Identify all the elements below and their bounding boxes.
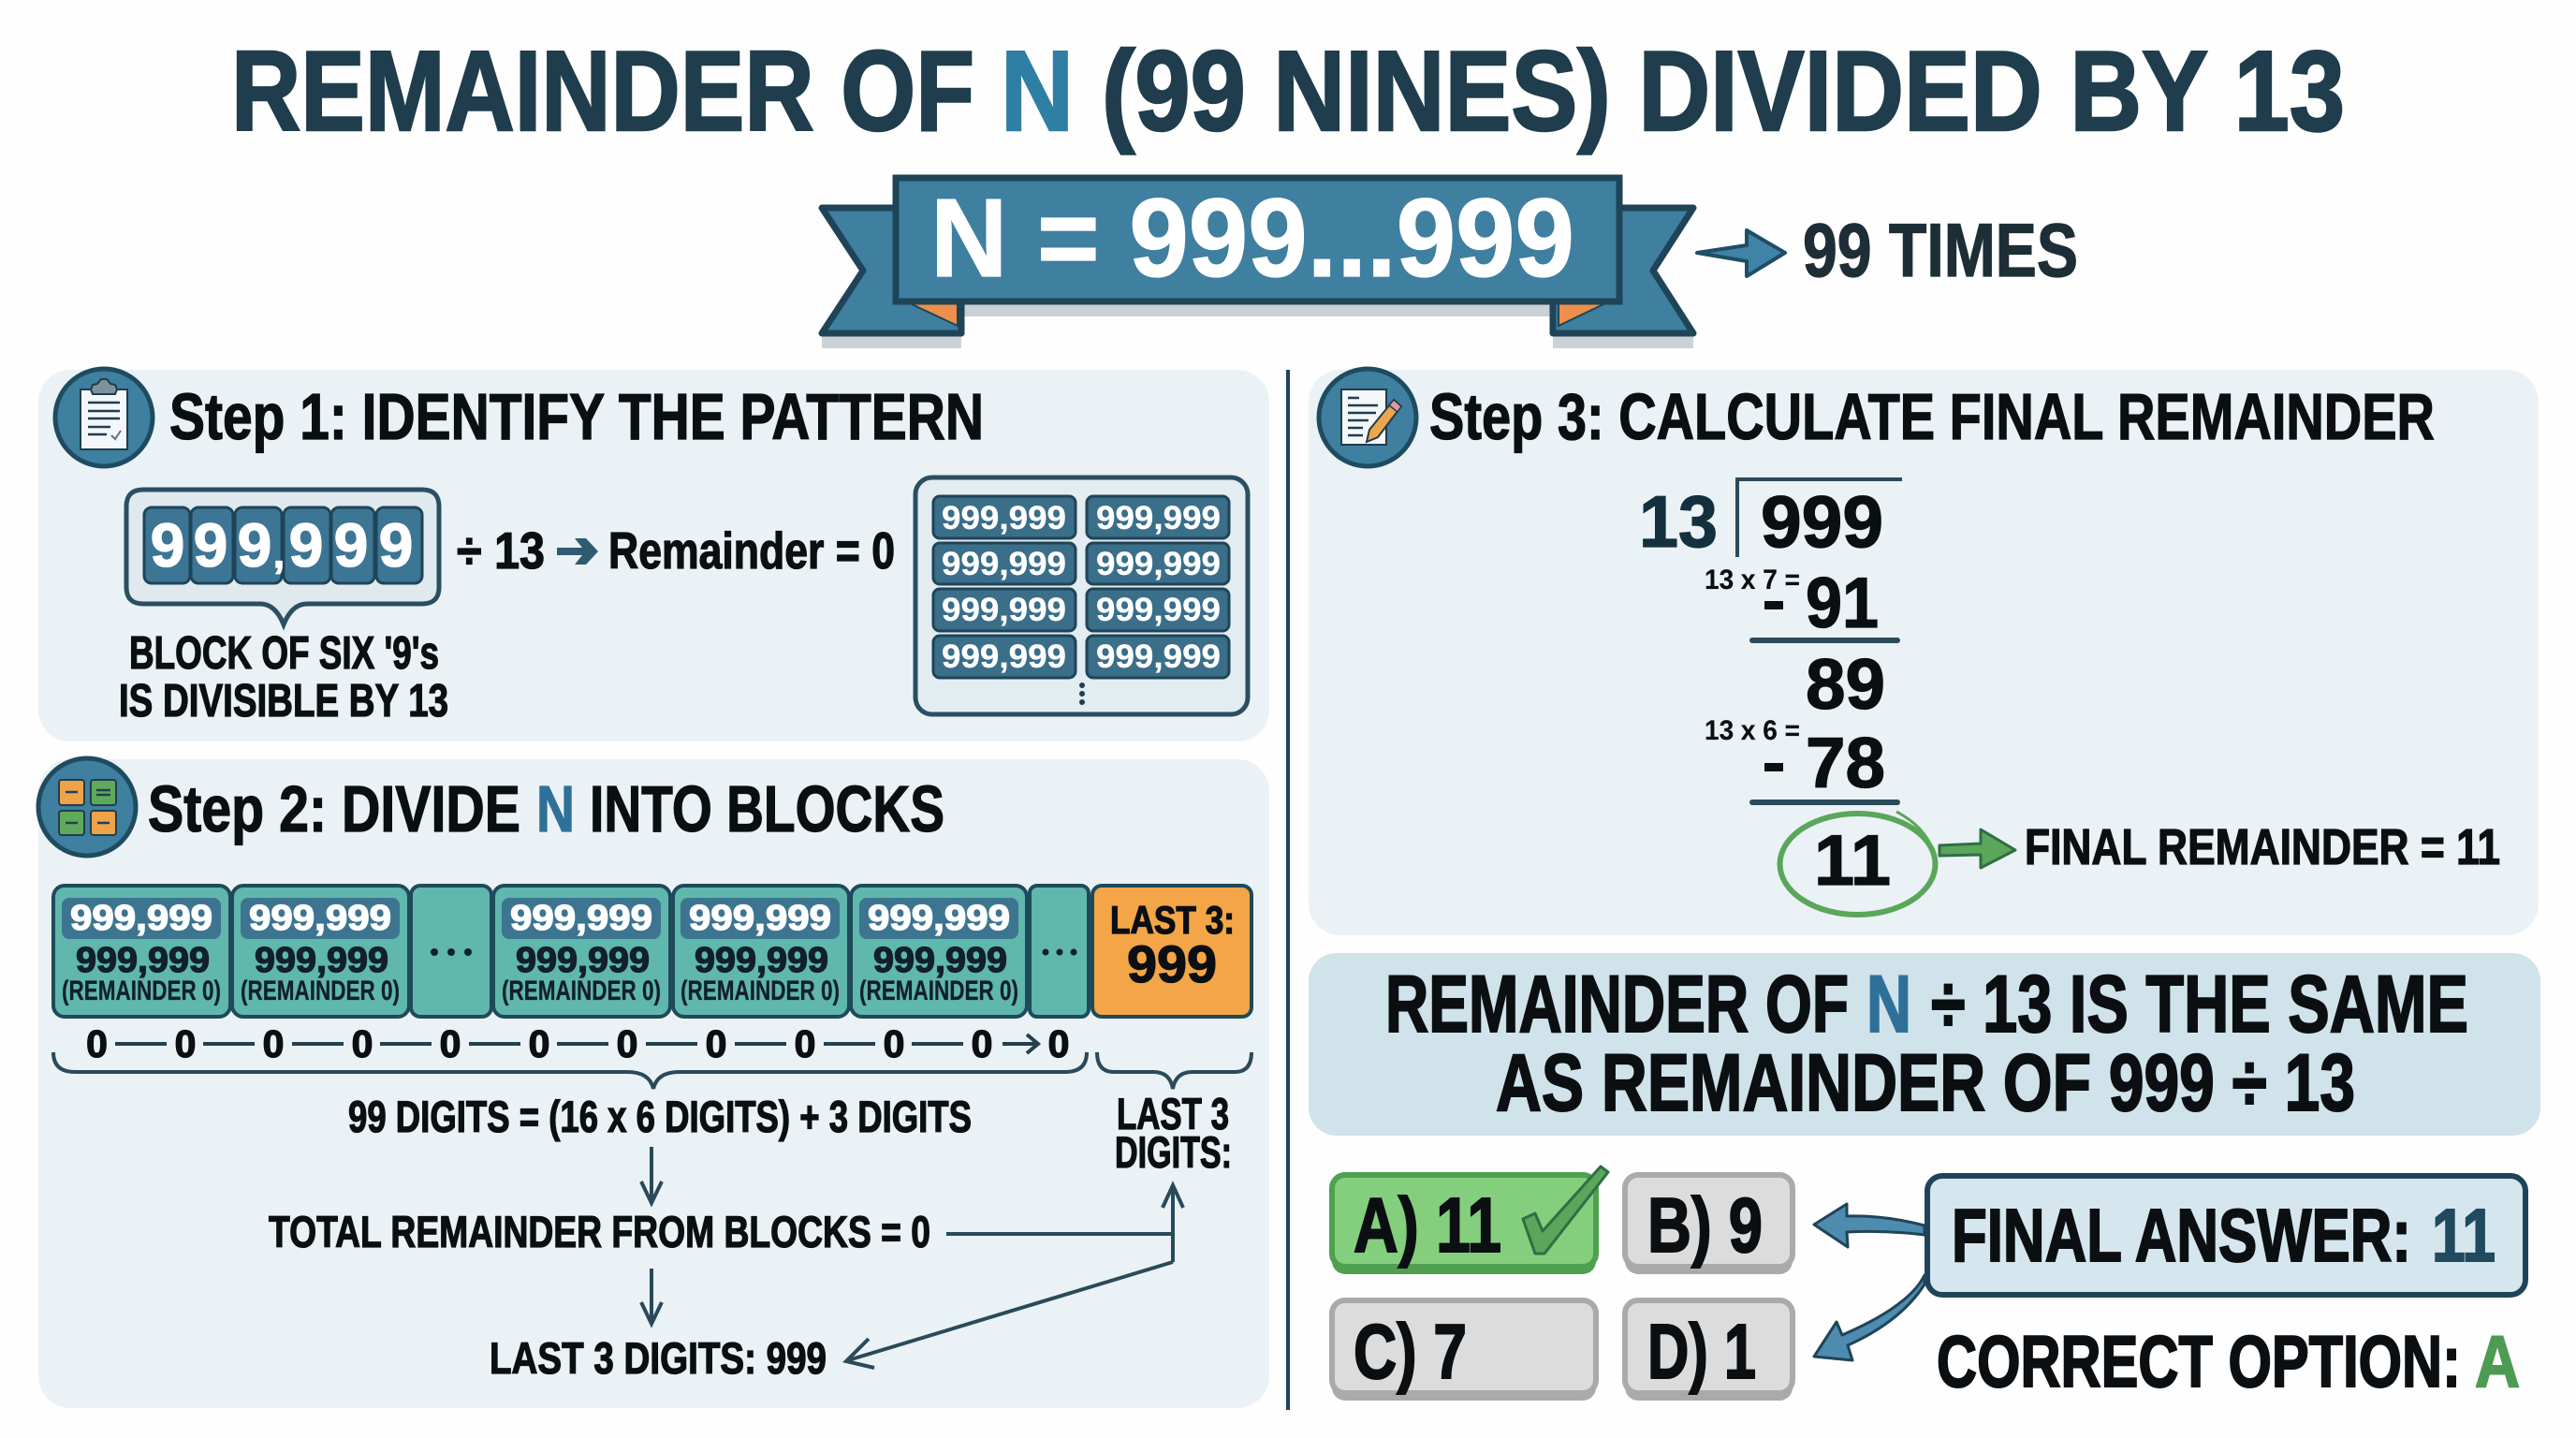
band: conclusion: [1309, 953, 2540, 1136]
text: digit breakdown: 99 DIGITS = (16 x 6 DIGITS) + 3 DIGITS: [348, 1092, 972, 1141]
title: N: [1001, 27, 1074, 154]
callout: six nines block: 9: [151, 510, 184, 580]
block: 4: 999,999: [695, 941, 828, 980]
arrow: diagonal to last digits: [846, 1262, 1173, 1368]
block: last 3 digits: LAST 3:: [1110, 898, 1235, 942]
grid of blocks: 999,999: [942, 592, 1066, 628]
callout: six nines block: 9: [289, 510, 323, 580]
option B: B) 9: [1647, 1181, 1763, 1269]
block: 2: [232, 886, 409, 1017]
caption: block of six: [119, 628, 448, 726]
long division: 78: [1806, 724, 1885, 803]
band: conclusion: AS REMAINDER OF 999 ÷ 13: [1496, 1038, 2355, 1128]
block: ellipsis end: [1030, 886, 1089, 1017]
arrow: final remainder: [1939, 829, 2015, 868]
block: 4: (REMAINDER 0): [681, 976, 840, 1006]
remainder chain: 0: [440, 1022, 461, 1065]
arrow: down to total: [641, 1147, 662, 1203]
block: last 3 digits: [1092, 886, 1251, 1017]
title: REMAINDER OF: [231, 27, 974, 154]
option C: [1332, 1300, 1596, 1401]
panel: step 1: [38, 369, 1269, 741]
caption: block of six: IS DIVISIBLE BY 13: [119, 676, 448, 726]
long division: 999: [1761, 480, 1883, 563]
vertical divider: [1286, 370, 1290, 1410]
option A: A) 11: [1354, 1181, 1501, 1269]
caption: block of six: BLOCK OF SIX '9's: [129, 628, 439, 679]
remainder chain: 0: [263, 1022, 284, 1065]
grid of blocks: [915, 477, 1248, 714]
remainder chain: 0: [884, 1022, 904, 1065]
icon: check mark: [1523, 1167, 1608, 1254]
long division: [1639, 479, 1936, 915]
block: 1: 999,999: [76, 941, 210, 980]
grid of blocks: 999,999: [942, 546, 1066, 582]
callout: six nines block: 9: [379, 510, 413, 580]
banner: N = 999...999: N = 999...999: [930, 176, 1574, 301]
block: 1: (REMAINDER 0): [62, 976, 221, 1006]
block: last 3 digits: 999: [1127, 934, 1217, 993]
long division: 11: [1814, 821, 1891, 901]
block: 3: 999,999: [510, 899, 652, 938]
text: last 3 digits 999: LAST 3 DIGITS: 999: [490, 1333, 827, 1383]
box: final answer: [1927, 1176, 2525, 1295]
banner: N = 999...999: [822, 176, 1693, 348]
text: correct option: A: [2475, 1320, 2520, 1402]
remainder chain: 0: [175, 1022, 196, 1065]
remainder chain: 0: [617, 1022, 637, 1065]
icon: notepad and pencil: [1319, 369, 1416, 466]
long division: 89: [1806, 645, 1885, 725]
block: 2: 999,999: [255, 941, 388, 980]
band: conclusion: REMAINDER OF: [1385, 960, 1849, 1049]
arrow: answer to D: [1814, 1275, 1925, 1360]
block: 5: 999,999: [868, 899, 1010, 938]
option C: C) 7: [1354, 1308, 1467, 1395]
grid of blocks: 999,999: [1096, 592, 1221, 628]
remainder chain: 0: [1048, 1022, 1069, 1065]
heading: step 2: Step 2: DIVIDE: [148, 772, 520, 845]
heading: step 2: [148, 772, 944, 845]
block: 3: (REMAINDER 0): [502, 976, 661, 1006]
option D: D) 1: [1647, 1308, 1756, 1395]
arrow: to remainder: [557, 538, 598, 565]
remainder chain: 0: [795, 1022, 815, 1065]
option A: [1332, 1167, 1608, 1274]
title: (99 NINES) DIVIDED BY 13: [1102, 27, 2345, 154]
remainder chain: [86, 1022, 1069, 1065]
remainder chain: 0: [529, 1022, 549, 1065]
title: [231, 27, 2345, 154]
icon: clipboard: [55, 369, 153, 466]
block: 5: [851, 886, 1027, 1017]
block: 1: 999,999: [70, 899, 212, 938]
grid of blocks: 999,999: [942, 500, 1066, 536]
block: 2: 999,999: [249, 899, 391, 938]
arrow: answer to B: [1814, 1204, 1925, 1247]
grid of blocks: 999,999: [1096, 638, 1221, 675]
panel: step 2: [38, 758, 1269, 1408]
heading: step 2: N: [536, 772, 575, 845]
block: 5: (REMAINDER 0): [859, 976, 1018, 1006]
callout: six nines block: 9: [238, 510, 271, 580]
block: 4: 999,999: [689, 899, 831, 938]
long division: 13 x 6 =: [1705, 715, 1800, 746]
brace: 96 digits: [53, 1052, 1087, 1089]
icon: calculator tiles: [38, 758, 136, 856]
block: 4: [673, 886, 849, 1017]
panel: step 3: [1309, 369, 2539, 935]
callout: six nines block: 9: [194, 510, 227, 580]
heading: step 2: INTO BLOCKS: [590, 772, 944, 845]
box: final answer: FINAL ANSWER:: [1952, 1194, 2411, 1277]
grid of blocks: 999,999: [1096, 500, 1221, 536]
grid of blocks: 999,999: [1096, 546, 1221, 582]
block: 2: (REMAINDER 0): [241, 976, 400, 1006]
label: 99 times: 99 TIMES: [1803, 209, 2078, 293]
block: 3: [493, 886, 670, 1017]
long division: 13: [1639, 480, 1718, 563]
callout: six nines block: [126, 490, 439, 624]
text: last 3 digits label: LAST 3: [1117, 1089, 1229, 1138]
remainder chain: 0: [972, 1022, 992, 1065]
callout: six nines block: ,: [273, 531, 285, 577]
block: 5: 999,999: [873, 941, 1007, 980]
text: total remainder: TOTAL REMAINDER FROM BLOCKS = 0: [269, 1207, 930, 1256]
callout: six nines block: 9: [334, 510, 368, 580]
text: last 3 digits label: [1115, 1089, 1232, 1177]
band: conclusion: N: [1866, 960, 1911, 1049]
block: ellipsis: [411, 886, 491, 1017]
grid of blocks: 999,999: [942, 638, 1066, 675]
block: 3: 999,999: [516, 941, 650, 980]
heading: step 1: Step 1: IDENTIFY THE PATTERN: [169, 380, 984, 453]
long division: 13 x 7 =: [1705, 565, 1800, 595]
block: 1: [53, 886, 230, 1017]
remainder chain: 0: [86, 1022, 108, 1065]
brace: last 3 digits: [1097, 1052, 1251, 1089]
remainder chain: 0: [352, 1022, 373, 1065]
arrow to 99 times: [1697, 230, 1785, 276]
connector: total to last digits: [946, 1185, 1183, 1262]
remainder chain: 0: [706, 1022, 726, 1065]
arrow: down to last digits: [641, 1269, 662, 1324]
text: remainder 0: Remainder = 0: [608, 521, 895, 580]
long division: 91: [1806, 564, 1879, 643]
box: final answer: 11: [2432, 1194, 2496, 1277]
text: last 3 digits label: DIGITS:: [1115, 1127, 1232, 1177]
text: divide by 13: ÷ 13: [457, 521, 545, 580]
